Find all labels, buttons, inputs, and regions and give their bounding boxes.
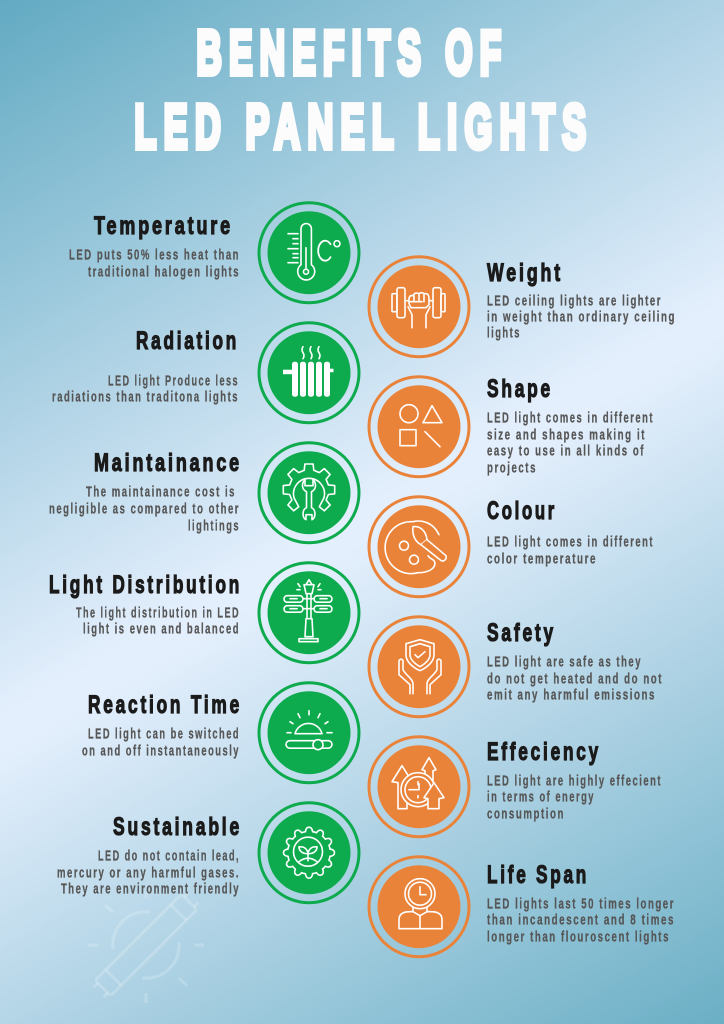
item: Effeciency: consumption	[487, 805, 565, 822]
item: Radiation: radiations than traditona lights	[52, 388, 239, 405]
item: Temperature: Temperature	[94, 212, 233, 240]
item: Maintainance: lightings	[188, 517, 240, 534]
icon: fist and dumbbell	[369, 257, 469, 357]
item: Reaction Time: Reaction Time	[88, 691, 242, 719]
item: Maintainance	[49, 449, 242, 534]
item: Light Distribution: The light distribution in LED	[76, 604, 240, 621]
item: Sustainable: mercury or any harmful gases.	[57, 864, 240, 881]
item: Sustainable: They are environment friendly	[61, 880, 240, 897]
item: Maintainance: The maintainance cost is	[86, 483, 236, 500]
icon: radiator	[259, 323, 359, 423]
icon: shield and hands	[369, 617, 469, 717]
icon: person with clock	[369, 857, 469, 957]
item: Reaction Time	[82, 691, 242, 759]
item: Life Span: Life Span	[487, 861, 589, 889]
icon: geometric shapes	[369, 377, 469, 477]
icon: clock with arrows	[369, 737, 469, 837]
item: Sustainable: LED do not contain lead,	[98, 847, 240, 864]
item: Reaction Time: LED light can be switched	[88, 725, 240, 742]
item: Light Distribution: light is even and balanced	[83, 620, 240, 637]
item: Colour: Colour	[487, 497, 557, 525]
icon: sunrise slider	[259, 683, 359, 783]
icon: thermometer	[259, 203, 359, 303]
item: Radiation: Radiation	[136, 327, 239, 355]
icon: paint palette	[369, 497, 469, 597]
item: Maintainance: negligible as compared to other	[49, 500, 240, 517]
item: Safety	[487, 619, 663, 703]
item: Colour: color temperature	[487, 550, 597, 567]
item: Weight: lights	[487, 324, 521, 341]
item: Colour	[487, 497, 654, 567]
title	[134, 19, 594, 162]
item: Temperature	[69, 212, 240, 280]
item: Light Distribution	[49, 571, 242, 637]
item: Weight	[487, 259, 676, 341]
item: Sustainable	[57, 813, 242, 897]
item: Radiation: LED light Produce less	[108, 372, 239, 389]
item: Shape	[487, 375, 654, 476]
item: Life Span	[487, 861, 675, 945]
item: Light Distribution: Light Distribution	[49, 571, 242, 599]
item: Weight: Weight	[487, 259, 563, 287]
item: Reaction Time: on and off instantaneously	[82, 742, 240, 759]
item: Shape: projects	[487, 459, 537, 476]
watermark: LED tube light	[88, 890, 204, 1003]
item: Safety: Safety	[487, 619, 556, 647]
item: Effeciency	[487, 738, 662, 822]
item: Maintainance: Maintainance	[94, 449, 242, 477]
icon: lamp post with signs	[259, 563, 359, 663]
item: Temperature: LED puts 50% less heat than	[69, 246, 240, 263]
item: Effeciency: in terms of energy	[487, 788, 595, 805]
item: Shape: Shape	[487, 375, 553, 403]
icon: gear and wrench	[259, 443, 359, 543]
item: Sustainable: Sustainable	[113, 813, 242, 841]
icon: gear with plant	[259, 803, 359, 903]
item: Radiation	[52, 327, 239, 405]
item: Effeciency: Effeciency	[487, 738, 601, 766]
item: Temperature: traditional halogen lights	[88, 263, 240, 280]
